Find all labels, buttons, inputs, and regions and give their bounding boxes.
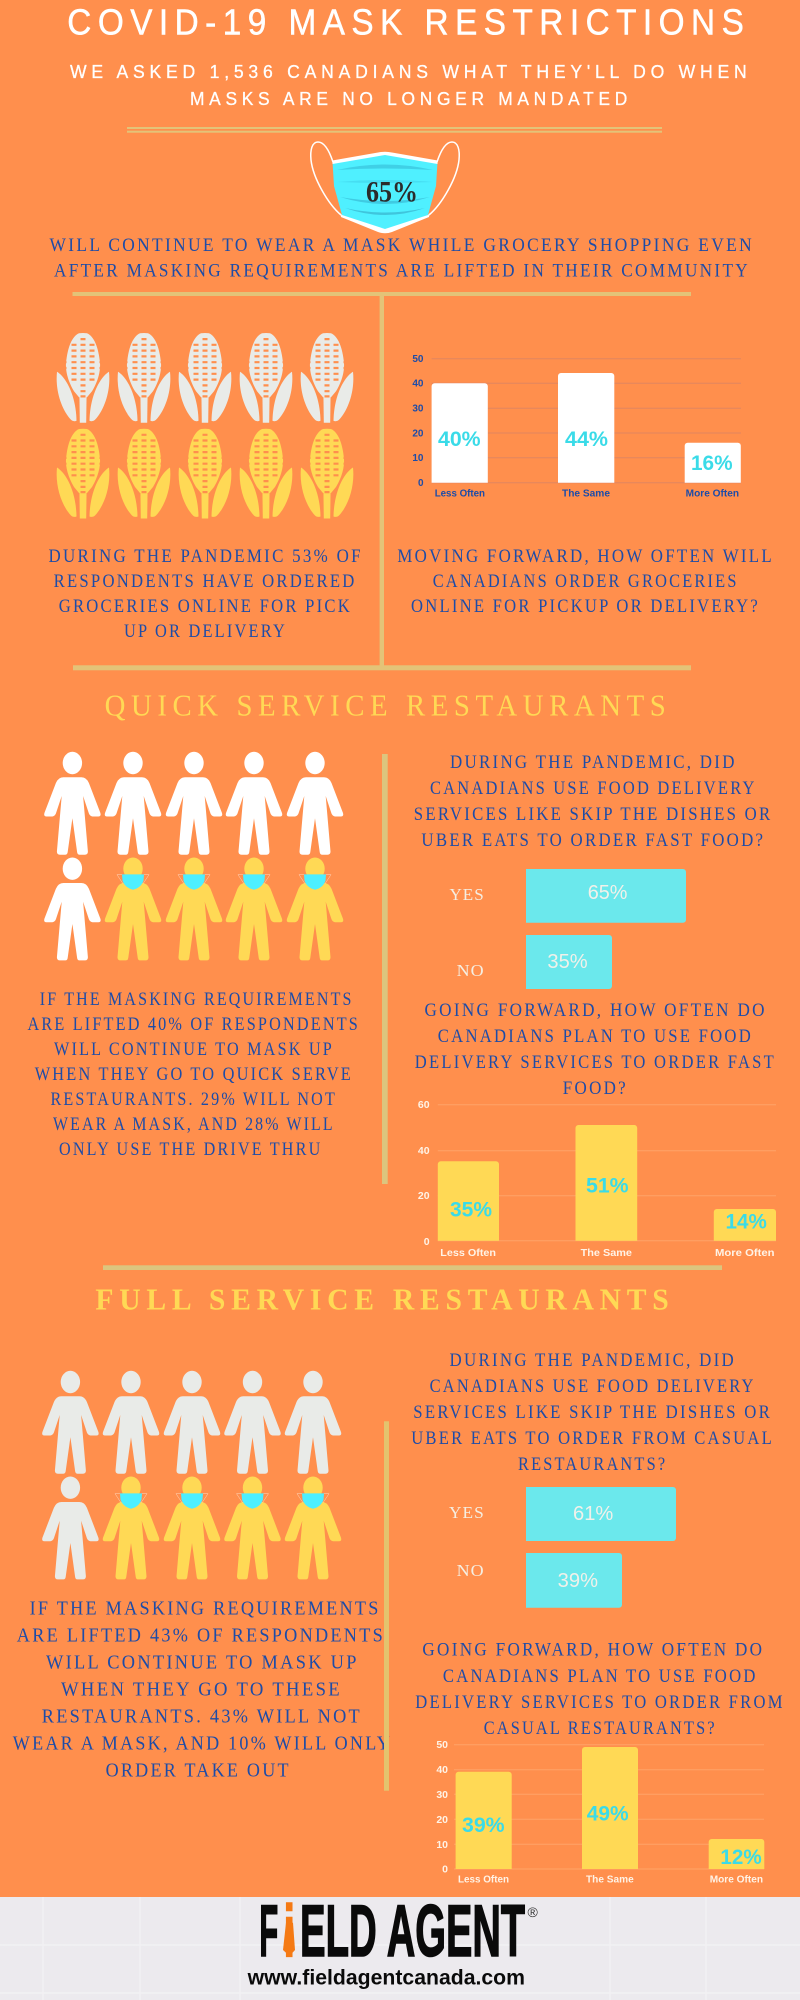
bar chart: fast food delivery frequency: More Often — [715, 1247, 774, 1259]
bar chart: fast food delivery frequency: 40 — [418, 1145, 430, 1157]
bar chart: grocery ordering frequency: 16% — [691, 452, 733, 475]
text: fast food going forward question — [415, 1001, 776, 1099]
bar chart: grocery ordering frequency: 44% — [565, 428, 608, 451]
icon grid: people full service — [42, 1371, 341, 1579]
text: casual restaurants delivery question: CANADIANS USE FOOD DELIVERY — [430, 1377, 756, 1397]
logo: field agent — [259, 1891, 538, 1972]
bar chart: grocery ordering frequency: 0 — [418, 478, 424, 489]
text: moving forward question: CANADIANS ORDER GROCERIES — [433, 572, 739, 592]
text: full service masking statistic: WHEN THEY GO TO THESE — [61, 1679, 342, 1701]
bar chart: grocery ordering frequency: 20 — [412, 428, 424, 439]
text: online grocery statistic: UP OR DELIVERY — [124, 622, 287, 642]
bar chart: casual restaurants yes no: NO — [457, 1561, 485, 1580]
text: quick serve masking statistic: ONLY USE THE DRIVE THRU — [59, 1140, 322, 1160]
bar chart: fast food delivery frequency: 35% — [450, 1199, 492, 1222]
text: full service masking statistic: ORDER TAKE OUT — [106, 1760, 291, 1782]
bar chart: grocery ordering frequency: The Same — [562, 489, 610, 500]
bar chart: grocery ordering frequency — [412, 354, 741, 500]
text: full service masking statistic: RESTAURANTS. 43% WILL NOT — [42, 1706, 362, 1728]
bar chart: casual restaurants yes no — [449, 1487, 676, 1608]
bar chart: casual restaurants yes no: 61% — [573, 1503, 614, 1525]
bar chart: casual restaurant delivery frequency: 10 — [436, 1839, 448, 1851]
bar chart: fast food delivery frequency: Less Often — [440, 1247, 496, 1259]
logo: field agent: F — [259, 1891, 278, 1972]
bar chart: fast food delivery frequency: 20 — [418, 1190, 430, 1202]
text: fast food going forward question: GOING FORWARD, HOW OFTEN DO — [424, 1001, 767, 1021]
text: online grocery statistic: DURING THE PANDEMIC 53% OF — [48, 547, 363, 567]
subtitle: MASKS ARE NO LONGER MANDATED — [190, 88, 632, 109]
text: quick serve masking statistic: RESTAURANTS. 29% WILL NOT — [50, 1090, 337, 1110]
logo: field agent: ELD — [300, 1891, 377, 1972]
text: quick serve masking statistic: WILL CONTINUE TO MASK UP — [54, 1040, 334, 1060]
logo: field agent: AGENT — [387, 1891, 525, 1972]
bar chart: casual restaurant delivery frequency: 40 — [436, 1764, 448, 1776]
text: casual restaurants delivery question: DURING THE PANDEMIC, DID — [450, 1351, 736, 1371]
bar chart: casual restaurant delivery frequency: 39% — [462, 1814, 505, 1837]
text: quick serve masking statistic: WEAR A MASK, AND 28% WILL — [53, 1115, 335, 1135]
bar chart: casual restaurants yes no: YES — [449, 1503, 485, 1522]
bar chart: fast food delivery frequency: 14% — [726, 1210, 767, 1233]
bar chart: casual restaurant delivery frequency: 0 — [442, 1864, 448, 1876]
text: moving forward question — [397, 547, 774, 617]
text: casual restaurants delivery question — [411, 1351, 774, 1475]
text: casual restaurants going forward question: CANADIANS PLAN TO USE FOOD — [443, 1667, 758, 1687]
bar chart: grocery ordering frequency: 40% — [438, 428, 481, 451]
text: casual restaurants delivery question: RESTAURANTS? — [518, 1455, 667, 1475]
bar chart: fast food delivery frequency: 0 — [424, 1236, 430, 1248]
bar chart: casual restaurant delivery frequency: 49% — [587, 1802, 629, 1825]
bar chart: fast food delivery frequency: 60 — [418, 1099, 430, 1111]
bar chart: fast food yes no: 65% — [588, 882, 628, 904]
text: online grocery statistic: RESPONDENTS HAVE ORDERED — [54, 572, 357, 592]
bar chart: fast food yes no: YES — [450, 885, 485, 904]
bar chart: casual restaurant delivery frequency: More Often — [710, 1874, 763, 1886]
bar chart: fast food yes no — [450, 869, 686, 989]
footer — [0, 1891, 800, 2000]
bar chart: casual restaurant delivery frequency: 50 — [436, 1739, 448, 1751]
text: full service masking statistic: WEAR A MASK, AND 10% WILL ONLY — [13, 1733, 392, 1755]
bar chart: casual restaurant delivery frequency — [436, 1739, 764, 1886]
title: COVID-19 MASK RESTRICTIONS — [67, 1, 750, 42]
text: casual restaurants going forward question: CASUAL RESTAURANTS? — [484, 1719, 717, 1739]
logo: field agent: i — [284, 1891, 295, 1972]
text: fast food delivery question: SERVICES LIKE SKIP THE DISHES OR — [414, 805, 772, 825]
bar chart: grocery ordering frequency: 50 — [412, 354, 424, 365]
bar chart: fast food yes no: 35% — [547, 951, 588, 973]
text: 65% grocery statement: WILL CONTINUE TO WEAR A MASK WHILE GROCERY SHOPPING EVEN — [50, 236, 754, 256]
text: fast food going forward question: FOOD? — [563, 1079, 628, 1099]
bar chart: casual restaurant delivery frequency: 12% — [720, 1846, 762, 1869]
text: fast food going forward question: CANADIANS PLAN TO USE FOOD — [438, 1027, 753, 1047]
text: fast food delivery question: UBER EATS TO ORDER FAST FOOD? — [421, 831, 765, 851]
text: moving forward question: MOVING FORWARD, HOW OFTEN WILL — [397, 547, 774, 567]
heading: full service restaurants: FULL SERVICE RESTAURANTS — [95, 1281, 674, 1316]
bar chart: fast food delivery frequency: 51% — [586, 1174, 629, 1197]
bar chart: grocery ordering frequency: 30 — [412, 404, 424, 415]
subtitle — [70, 61, 752, 109]
text: fast food delivery question: CANADIANS USE FOOD DELIVERY — [430, 779, 757, 799]
text: fast food delivery question: DURING THE PANDEMIC, DID — [450, 753, 737, 773]
text: fast food delivery question — [414, 753, 772, 851]
text: quick serve masking statistic: IF THE MASKING REQUIREMENTS — [40, 990, 354, 1010]
bar chart: grocery ordering frequency: 40 — [412, 379, 424, 390]
text: casual restaurants going forward question: GOING FORWARD, HOW OFTEN DO — [422, 1641, 764, 1661]
bar chart: casual restaurants yes no: 39% — [558, 1570, 598, 1592]
bar chart: fast food yes no: NO — [457, 961, 485, 980]
bar chart: casual restaurant delivery frequency: Less Often — [458, 1874, 509, 1886]
text: quick serve masking statistic: WHEN THEY GO TO QUICK SERVE — [35, 1065, 353, 1085]
text: quick serve masking statistic: ARE LIFTED 40% OF RESPONDENTS — [28, 1015, 360, 1035]
text: online grocery statistic — [48, 547, 363, 642]
text: moving forward question: ONLINE FOR PICKUP OR DELIVERY? — [411, 597, 760, 617]
text: quick serve masking statistic — [28, 990, 360, 1160]
text: full service masking statistic: ARE LIFTED 43% OF RESPONDENTS — [17, 1625, 385, 1647]
icon grid: corn — [57, 333, 353, 518]
icon: surgical mask with 65% — [311, 142, 459, 233]
text: full service masking statistic: WILL CONTINUE TO MASK UP — [46, 1652, 359, 1674]
mask percentage: 65% — [366, 176, 418, 209]
text: 65% grocery statement — [50, 236, 754, 282]
bar chart: casual restaurant delivery frequency: 20 — [436, 1814, 448, 1826]
text: online grocery statistic: GROCERIES ONLINE FOR PICK — [59, 597, 352, 617]
bar chart: grocery ordering frequency: 10 — [412, 453, 424, 464]
bar chart: fast food delivery frequency: The Same — [581, 1247, 632, 1259]
text: casual restaurants going forward question — [415, 1641, 785, 1739]
bar chart: casual restaurant delivery frequency: 30 — [436, 1789, 448, 1801]
heading: quick service restaurants: QUICK SERVICE RESTAURANTS — [105, 688, 671, 723]
logo: field agent: ® — [528, 1904, 538, 1920]
bar chart: grocery ordering frequency: More Often — [686, 489, 739, 500]
icon grid: people quick service — [44, 752, 343, 960]
bar chart: grocery ordering frequency: Less Often — [435, 489, 485, 500]
subtitle: WE ASKED 1,536 CANADIANS WHAT THEY'LL DO WHEN — [70, 61, 752, 82]
text: full service masking statistic: IF THE MASKING REQUIREMENTS — [30, 1598, 381, 1620]
bar chart: casual restaurant delivery frequency: The Same — [586, 1874, 634, 1886]
bar chart: fast food delivery frequency — [418, 1099, 776, 1259]
text: casual restaurants delivery question: SERVICES LIKE SKIP THE DISHES OR — [413, 1403, 772, 1423]
footer website: www.fieldagentcanada.com — [247, 1966, 525, 1989]
text: full service masking statistic — [13, 1598, 392, 1782]
text: 65% grocery statement: AFTER MASKING REQUIREMENTS ARE LIFTED IN THEIR COMMUNITY — [54, 262, 750, 282]
